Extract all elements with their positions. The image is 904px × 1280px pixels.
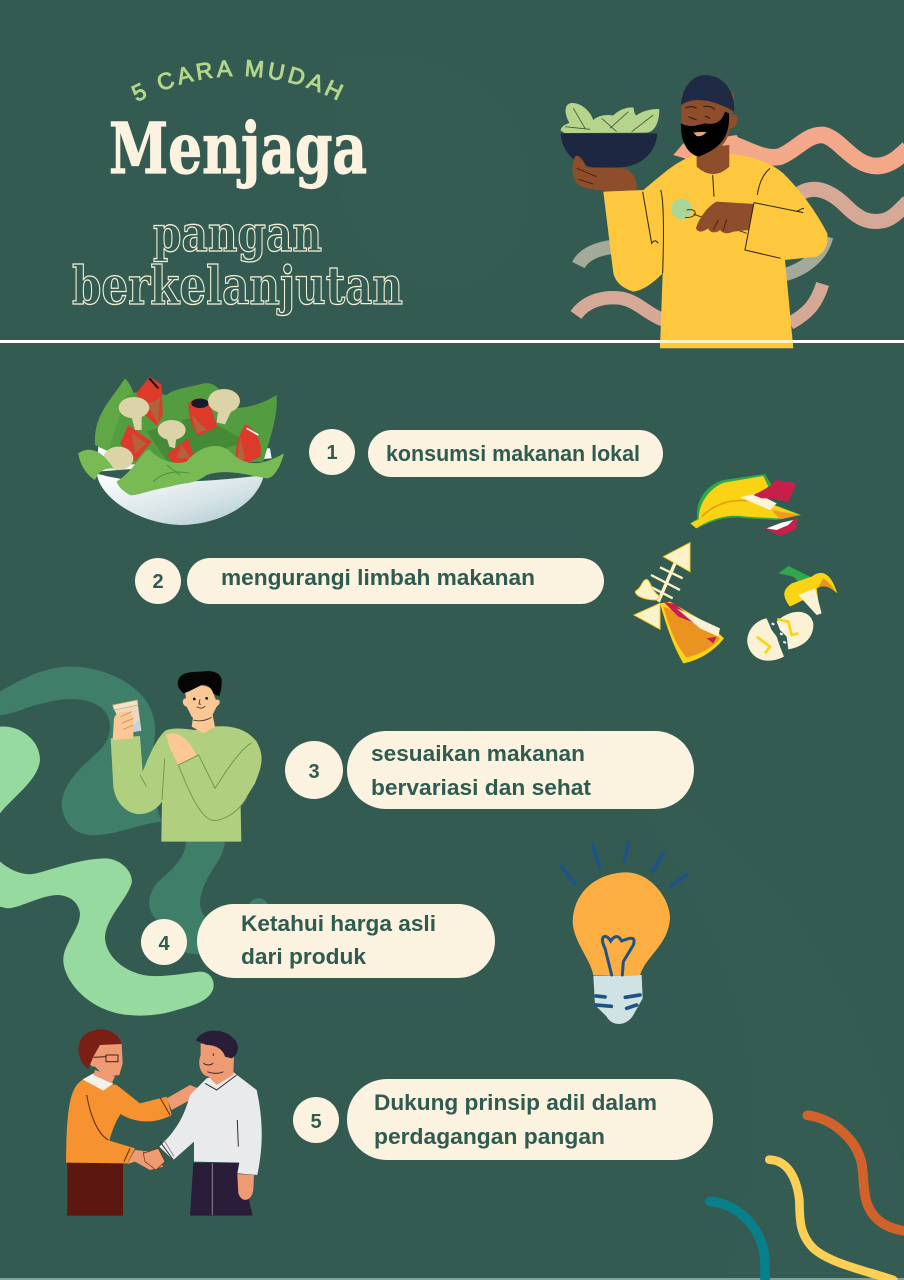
number badge 5 (293, 1097, 339, 1143)
right man (159, 1031, 262, 1216)
text pill 2: mengurangi limbah makanan (221, 565, 535, 590)
number badge 1 (309, 429, 355, 475)
number badge 3: 3 (308, 761, 320, 783)
text pill 1 (368, 430, 663, 477)
decorative curves: bottom right (710, 1115, 904, 1280)
number badge 5: 5 (310, 1111, 322, 1133)
number badge 2 (135, 558, 181, 604)
left man (66, 1029, 198, 1216)
number badge 4: 4 (158, 933, 170, 955)
text pill 4 (197, 904, 495, 978)
number badge 4 (141, 919, 187, 965)
banana peel (690, 474, 802, 536)
item 3 (285, 731, 694, 809)
decorative ribbons and person (0, 667, 268, 1016)
text pill 5: Dukung prinsip adil dalam (374, 1090, 657, 1115)
text pill 1: konsumsi makanan lokal (386, 441, 640, 466)
text pill 5: perdagangan pangan (374, 1124, 605, 1149)
number badge 3 (285, 741, 343, 799)
title: 5 cara mudah: 5 CARA MUDAH (131, 60, 344, 101)
illustration: man with glass (111, 671, 262, 842)
peel and eggshell (747, 566, 837, 661)
divider line (0, 340, 904, 343)
text pill 4: dari produk (241, 944, 367, 969)
title: Menjaga: Menjaga (109, 107, 367, 190)
number badge 2: 2 (152, 571, 164, 593)
dark green ribbon (0, 667, 162, 835)
text pill 5 (347, 1079, 713, 1160)
illustration: salad bowl (78, 377, 284, 525)
dark green ribbon lower (149, 840, 268, 955)
illustration: man holding salad bowl (561, 75, 904, 348)
illustration: handshake (66, 1029, 262, 1216)
text pill 3: bervariasi dan sehat (371, 775, 592, 800)
hands (143, 1148, 165, 1170)
title: pangan: pangan (153, 204, 322, 263)
title block (72, 60, 403, 317)
item 4 (141, 904, 495, 978)
illustration: light bulb (561, 842, 687, 1024)
item 5 (293, 1079, 713, 1160)
light green ribbon bottom (0, 858, 214, 1016)
text pill 2 (187, 558, 604, 604)
number badge 1: 1 (326, 442, 338, 464)
fish bone (634, 543, 690, 629)
text pill 4: Ketahui harga asli (241, 911, 436, 936)
text pill 3 (347, 731, 694, 809)
title: berkelanjutan: berkelanjutan (72, 256, 403, 317)
chicken leg (635, 579, 724, 663)
item 2 (135, 558, 604, 604)
illustration: food waste (634, 474, 837, 663)
item 1 (309, 429, 663, 477)
text pill 3: sesuaikan makanan (371, 741, 585, 766)
light green ribbon top (0, 727, 40, 813)
